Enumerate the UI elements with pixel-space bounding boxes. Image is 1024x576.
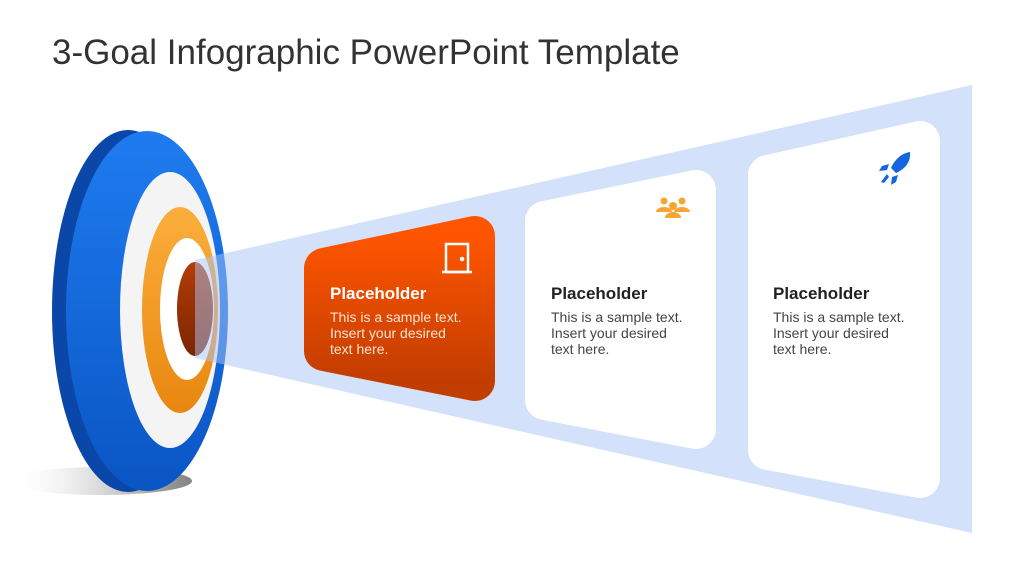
card 1: Insert your desired [330,325,446,341]
card 3: text here. [773,341,831,357]
card 3: Insert your desired [773,325,889,341]
card 1: This is a sample text. [330,309,462,325]
card 1 [324,236,475,381]
icon: rocket [879,152,910,185]
card 3 [768,141,920,478]
icon: door [442,244,472,272]
card 1: text here. [330,341,388,357]
card 2: Placeholder [551,284,648,303]
title: 3-Goal Infographic PowerPoint Template [52,33,680,72]
card 2: This is a sample text. [551,309,682,325]
shadow [8,467,192,495]
card 2 [545,190,696,429]
card 3: This is a sample text. [773,309,904,325]
card 3: Placeholder [773,284,870,303]
beam [195,85,972,533]
card 2: Insert your desired [551,325,667,341]
icon: people [656,198,690,218]
card 2: text here. [551,341,609,357]
target [52,130,228,492]
card 1: Placeholder [330,284,427,303]
